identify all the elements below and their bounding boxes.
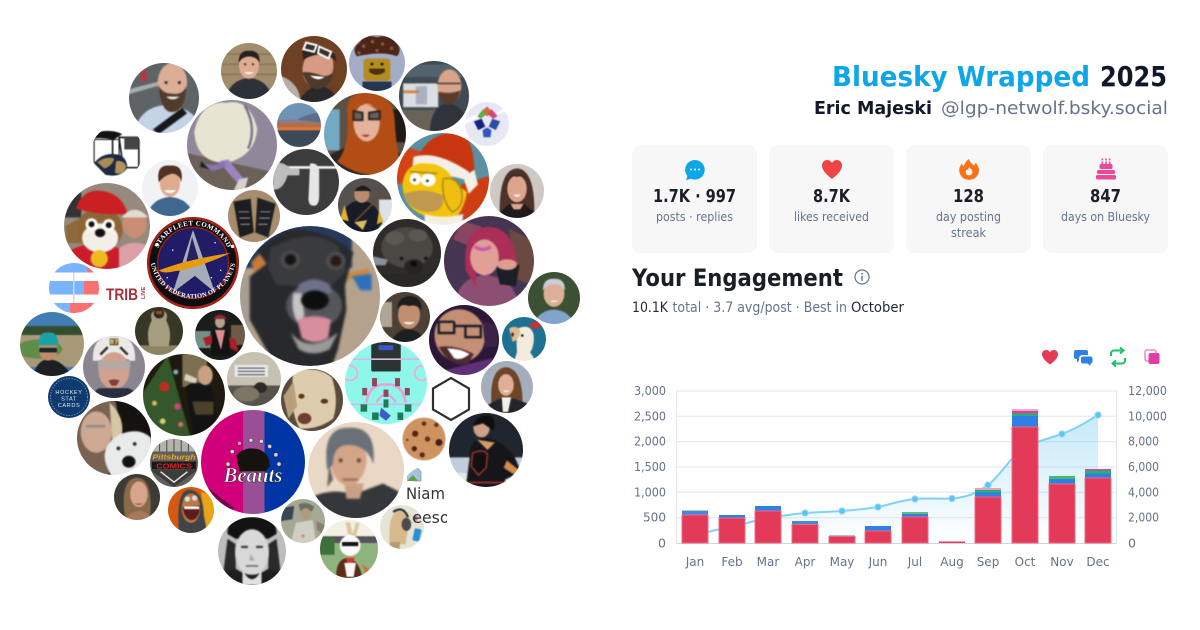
avatar: woman with white dog: [77, 401, 151, 475]
month labels: Aug: [940, 555, 964, 569]
heading: your engagement: Your Engagement: [631, 264, 843, 292]
left axis labels: 2,500: [634, 409, 666, 423]
avatar: hockey stat cards logo: HOCKEY: [55, 390, 83, 396]
avatar: Beauts team logo: Beauts: [223, 464, 282, 487]
cumulative area and line: [695, 412, 1101, 543]
avatar: girl with headphones and phone: [378, 503, 426, 551]
left axis labels: 3,000: [634, 384, 666, 398]
avatar bubble cluster: [20, 35, 580, 585]
month labels: Nov: [1050, 555, 1074, 569]
avatar: woman in blazer: [481, 361, 533, 413]
combo chart: monthly engagement: [634, 384, 1167, 569]
bar: Dec: [1085, 469, 1111, 543]
bar: Oct: [1012, 409, 1038, 543]
avatar: man with christmas tree: [143, 354, 225, 436]
panel: posts and replies: posts · replies: [656, 209, 733, 224]
avatar: striped blue and coral logo: [49, 263, 99, 313]
panel: day posting streak: 128: [953, 186, 984, 207]
panel: days on Bluesky: days on Bluesky: [1061, 209, 1151, 224]
avatar: cartoon burger character: [166, 485, 216, 535]
avatar: hockey stat cards logo: [48, 376, 90, 418]
user name and handle: @lgp-netwolf.bsky.social: [941, 98, 1168, 119]
bar: Nov: [1049, 476, 1075, 543]
left axis labels: 500: [643, 511, 666, 525]
avatar: cookie: [400, 415, 448, 463]
avatar: woman with dark long hair: [490, 164, 544, 218]
panel: day posting streak: day posting: [936, 209, 1001, 224]
left axis labels: [634, 384, 666, 550]
icon: birthday cake: [1096, 158, 1116, 180]
bar: Jan: [682, 510, 708, 543]
bar: Feb: [719, 515, 745, 543]
icon: quote legend: [1145, 350, 1160, 364]
avatar: hockey player in black jersey: [445, 409, 527, 491]
avatar: broken image alt text: Reesor: [402, 508, 456, 527]
month labels: Jan: [685, 555, 704, 569]
avatar: bald man with beard: [129, 63, 199, 133]
title: 2025: [1100, 60, 1167, 93]
avatar: man with grey hair: [528, 272, 580, 324]
panel: likes received: 8.7K: [813, 186, 851, 207]
chart legend icons: [1042, 348, 1160, 366]
avatar: starfleet command emblem: STARFLEET COMMAND: [154, 220, 231, 248]
avatar: Pittsburgh Comics logo: Pittsburgh: [152, 453, 196, 462]
avatar: cartoon rabbit with sunglasses: [317, 517, 381, 581]
avatar: Beauts team logo: [201, 410, 305, 514]
avatar: black and white arm photo: [273, 149, 339, 215]
month labels: Jun: [868, 555, 887, 569]
avatar: broken image alt text: Niam: [406, 484, 445, 503]
month labels: Dec: [1086, 555, 1110, 569]
avatar: sunset over water: [277, 103, 321, 147]
avatar: man in front of brick wall: [221, 43, 277, 99]
left axis labels: 2,000: [634, 435, 666, 449]
left axis labels: 0: [658, 536, 666, 550]
avatar: figure in ornate costume: [195, 310, 245, 360]
icon: chat bubble: [685, 160, 705, 180]
month labels: Mar: [757, 555, 779, 569]
right axis labels: 2,000: [1128, 511, 1159, 525]
month labels: Oct: [1015, 555, 1036, 569]
user name and handle: Eric Majeski: [814, 98, 932, 119]
right axis labels: 12,000: [1128, 384, 1167, 398]
avatar: award plaques: [228, 190, 280, 242]
avatar: man in teal cap on golf course: [20, 312, 84, 376]
icon: reply legend: [1074, 350, 1092, 366]
avatar: broken image alt text: [402, 468, 456, 527]
bar: Aug: [939, 542, 965, 543]
avatar: hockey player 87 in white helmet: [83, 336, 145, 398]
title: Bluesky Wrapped: [832, 60, 1090, 93]
bar: Apr: [792, 521, 818, 543]
avatar: hockey player 87 in white helmet: 87: [110, 339, 118, 346]
icon: flame: [959, 159, 979, 180]
avatar: TRIB live logo: LIVE: [141, 286, 147, 299]
panel: day posting streak: streak: [951, 225, 987, 240]
avatar: hexagon outline: [429, 377, 473, 421]
avatar: woman with pink hair: [444, 216, 534, 306]
avatar: white dog with santa hat: [502, 317, 546, 361]
avatar: Pittsburgh Comics logo: [150, 439, 198, 487]
avatar: hockey stat cards logo: STAT: [61, 396, 77, 402]
panel: likes received: [769, 145, 894, 253]
avatar: man indoors selfie: [380, 292, 430, 342]
avatar: black dog large: [240, 226, 380, 366]
avatar: hockey stat cards logo: CARDS: [58, 403, 80, 409]
engagement summary text: total · 3.7 avg/post · Best in: [672, 300, 847, 316]
chart grid: [676, 391, 1116, 544]
left axis labels: 1,500: [634, 460, 666, 474]
avatar: cartoon santa: [397, 133, 489, 225]
bar: Jul: [902, 512, 928, 543]
panel: days on Bluesky: [1043, 145, 1168, 253]
avatar: NES hockey game screen: [345, 342, 427, 424]
avatar: man with glasses at desk: [399, 61, 469, 131]
avatar: man in cap with sunglasses: [281, 36, 347, 102]
avatar: Pittsburgh Comics logo: COMICS: [156, 461, 192, 470]
avatar: black and white 80s portrait: [215, 514, 289, 588]
right axis labels: 6,000: [1128, 460, 1159, 474]
bar: May: [829, 535, 855, 543]
avatar: cartoon character behind egg shape: [187, 100, 277, 190]
avatar: rainbow ghost logo: [465, 102, 509, 146]
avatar: beaver mascot with man: [64, 183, 150, 269]
panel: day posting streak: [906, 145, 1031, 253]
avatar: comic panel with cat: [92, 130, 140, 176]
avatar: white dog face: [281, 369, 343, 431]
panel: days on Bluesky: 847: [1090, 186, 1121, 207]
avatar: penguins hockey player: [338, 178, 392, 232]
user name and handle: [814, 98, 1168, 119]
avatar: young woman selfie: [112, 472, 162, 522]
engagement summary text: 10.1K: [632, 300, 669, 316]
avatar: smiling man with glasses, purple light: [429, 305, 499, 375]
avatar: small black fluffy dog: [373, 219, 441, 287]
right axis labels: 4,000: [1128, 485, 1159, 499]
icon: info: [855, 270, 869, 284]
avatar: lego minifigure: [349, 35, 405, 91]
avatar: starfleet command emblem: [147, 217, 239, 309]
month labels: May: [830, 555, 854, 569]
avatar: penguin figure: [135, 307, 183, 355]
right axis labels: 0: [1128, 536, 1136, 550]
month labels: Apr: [795, 555, 815, 569]
icon: repost legend: [1111, 348, 1125, 366]
icon: like legend: [1042, 350, 1058, 364]
panel: posts and replies: 1.7K · 997: [653, 186, 736, 207]
avatar: starfleet command emblem: UNITED FEDERATION OF PLANETS: [151, 262, 235, 298]
panel: posts and replies: [632, 145, 757, 253]
left axis labels: 1,000: [634, 485, 666, 499]
avatar: TRIB live logo: TRIB: [106, 285, 138, 304]
avatar: dog under grey box with label: [227, 352, 281, 406]
bar: Sep: [975, 488, 1001, 543]
right axis labels: 10,000: [1128, 409, 1167, 423]
month labels: Sep: [977, 555, 999, 569]
bar: Jun: [865, 526, 891, 543]
panel: likes received: likes received: [794, 209, 869, 224]
right axis labels: 8,000: [1128, 435, 1159, 449]
avatar: portrait of young man with mullet: [308, 422, 404, 518]
bar: Mar: [755, 506, 781, 543]
right axis labels: [1128, 384, 1167, 550]
engagement summary text: October: [851, 300, 904, 316]
month labels: [685, 555, 1110, 569]
avatar: smiling man in blue shirt: [142, 160, 198, 216]
icon: heart: [822, 160, 842, 179]
avatar: camouflage soldier: [279, 497, 327, 545]
stacked bars: [682, 409, 1111, 543]
month labels: Jul: [907, 555, 922, 569]
avatar: woman with red hair and glasses: [324, 93, 406, 175]
month labels: Feb: [721, 555, 743, 569]
